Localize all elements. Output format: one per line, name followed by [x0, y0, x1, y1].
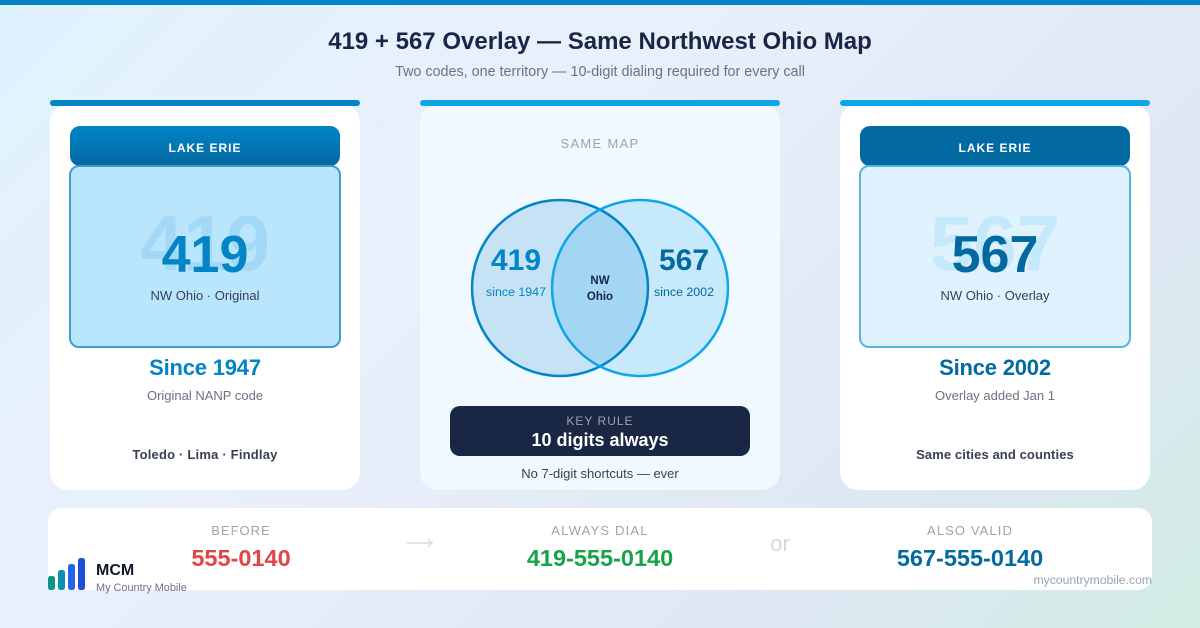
- venn sub 567: since 2002: [654, 285, 714, 299]
- same map label: SAME MAP: [560, 136, 640, 151]
- also valid label: ALSO VALID: [927, 523, 1013, 538]
- before label: BEFORE: [211, 523, 271, 538]
- watermark 419: 419: [140, 199, 270, 287]
- venn sub 419: since 1947: [486, 285, 546, 299]
- panel: 567: [840, 100, 1150, 490]
- panel card: [420, 104, 780, 490]
- arrow: [407, 538, 433, 548]
- before number: 555-0140: [191, 545, 291, 571]
- watermark 567: 567: [930, 199, 1060, 287]
- panel top bar: [50, 100, 360, 106]
- panel top bar: [840, 100, 1150, 106]
- map caption: NW Ohio · Original: [150, 288, 260, 303]
- since heading: Since 1947: [149, 355, 261, 380]
- brand name: MCM: [96, 562, 134, 579]
- panel top bar: [420, 100, 780, 106]
- circle 567: [552, 200, 728, 376]
- description: Original NANP code: [147, 388, 263, 403]
- key rule note: No 7-digit shortcuts — ever: [521, 466, 679, 481]
- code 567: 567: [952, 226, 1038, 284]
- since heading: Since 2002: [939, 355, 1051, 380]
- top accent bar: [0, 0, 1200, 5]
- venn diagram: [470, 198, 730, 378]
- lake erie banner: [70, 126, 340, 166]
- panel card: [50, 104, 360, 490]
- map area: [69, 165, 341, 348]
- lake erie banner: LAKE ERIE: [958, 141, 1032, 155]
- venn label 419: 419: [491, 244, 541, 277]
- subtitle: Two codes, one territory — 10-digit dialing required for every call: [395, 64, 805, 80]
- overlap: [553, 211, 647, 365]
- always dial number: 419-555-0140: [527, 545, 673, 571]
- brand logo: [48, 558, 187, 594]
- key rule box: [450, 406, 750, 456]
- overlap label: NW: [590, 275, 610, 287]
- also valid number: 567-555-0140: [897, 545, 1043, 571]
- key rule label: KEY RULE: [566, 414, 634, 428]
- code 419: 419: [162, 226, 248, 284]
- venn label 567: 567: [659, 244, 709, 277]
- icon: signal bars: [48, 558, 85, 590]
- panel: dialing strip: [48, 508, 1152, 590]
- description: Overlay added Jan 1: [935, 388, 1055, 403]
- map area: [859, 165, 1131, 348]
- circle 419: [472, 200, 648, 376]
- lake erie banner: [860, 126, 1130, 166]
- cities: Toledo · Lima · Findlay: [132, 447, 278, 462]
- panel: 419: [50, 100, 360, 490]
- or: or: [770, 531, 790, 556]
- map caption: NW Ohio · Overlay: [940, 288, 1050, 303]
- brand tagline: My Country Mobile: [96, 582, 187, 594]
- cities: Same cities and counties: [916, 447, 1074, 462]
- key rule value: 10 digits always: [531, 430, 669, 450]
- always dial label: ALWAYS DIAL: [551, 523, 649, 538]
- lake erie banner: LAKE ERIE: [168, 141, 242, 155]
- panel: same map: [420, 100, 780, 490]
- website url: mycountrymobile.com: [1033, 573, 1152, 587]
- overlap label 2: Ohio: [587, 291, 613, 303]
- panel card: [840, 104, 1150, 490]
- title: 419 + 567 Overlay — Same Northwest Ohio Map: [328, 28, 872, 55]
